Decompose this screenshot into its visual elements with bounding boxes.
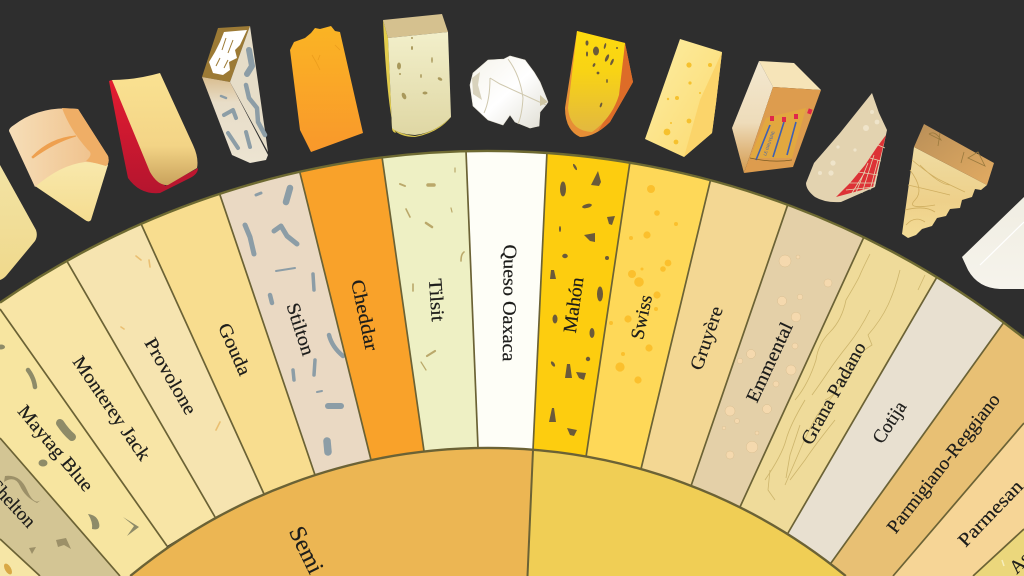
segment: Parmesan: Parmesan bbox=[954, 476, 1024, 551]
segment: Cheddar bbox=[299, 152, 424, 460]
icon: Parmesan cheese bbox=[902, 124, 994, 238]
segment: Parmesan bbox=[893, 423, 1024, 576]
segment: Shelton bbox=[0, 438, 120, 576]
segment: Provolone: Provolone bbox=[140, 335, 200, 419]
segment: Mahón: Mahón bbox=[560, 275, 589, 334]
segment: unnamed lower left bbox=[0, 539, 40, 576]
segment: Monterey Jack: Monterey Jack bbox=[68, 352, 155, 465]
segment: Asiago bbox=[973, 529, 1024, 576]
icon: Tilsit cheese bbox=[383, 14, 451, 137]
segment: Tilsit bbox=[381, 146, 478, 451]
segment: Parmigiano-Reggiano: Parmigiano-Reggiano bbox=[883, 390, 1005, 538]
icon: Mahón cheese bbox=[565, 31, 633, 137]
segment: Queso Oaxaca: Queso Oaxaca bbox=[498, 244, 520, 362]
icon: Cheddar cheese bbox=[290, 26, 363, 152]
segment: Queso Oaxaca bbox=[466, 146, 547, 450]
category: hard bbox=[528, 451, 844, 576]
icon: Queso Oaxaca cheese bbox=[470, 56, 548, 128]
segment: Gruyère: Gruyère bbox=[686, 304, 728, 373]
segment: Maytag Blue: Maytag Blue bbox=[13, 401, 97, 496]
segment: Grana Padano bbox=[740, 232, 940, 533]
icon: Monterey Jack cheese bbox=[9, 108, 109, 222]
segment: Stilton: Stilton bbox=[282, 300, 318, 359]
segment: Cotija bbox=[788, 273, 1007, 563]
segment: Cheddar: Cheddar bbox=[346, 278, 382, 353]
segment: Tilsit: Tilsit bbox=[424, 278, 448, 323]
icon: Swiss cheese bbox=[645, 39, 722, 157]
icon: partial cheese far left bbox=[0, 165, 37, 280]
segment: Cotija: Cotija bbox=[869, 397, 912, 448]
segment: Stilton bbox=[218, 168, 371, 475]
segment: Emmental bbox=[691, 199, 866, 507]
segment: Emmental: Emmental bbox=[742, 319, 798, 406]
icon: white cheese far right bbox=[962, 197, 1024, 289]
panel: outer ring of cheese segments bbox=[0, 146, 1024, 576]
segment: Maytag Blue bbox=[0, 309, 167, 576]
segment: Swiss: Swiss bbox=[627, 293, 657, 341]
segment: Gruyère bbox=[641, 173, 790, 486]
segment: Provolone bbox=[66, 222, 264, 517]
segment: Gouda: Gouda bbox=[213, 320, 255, 379]
segment: Parmigiano-Reggiano bbox=[831, 318, 1024, 576]
icon: Gruyère cheese bbox=[732, 61, 821, 173]
segment: Grana Padano: Grana Padano bbox=[797, 339, 871, 449]
icon: Stilton cheese bbox=[202, 26, 268, 163]
segment: Mahón bbox=[533, 147, 631, 457]
panel: inner ring categories bbox=[120, 440, 860, 576]
segment: Monterey Jack bbox=[0, 259, 215, 546]
segment: Gouda bbox=[140, 190, 315, 494]
icon: Gouda cheese bbox=[109, 73, 198, 193]
category: semi-soft bbox=[120, 440, 533, 576]
icon: Gruyère cheese: LE GRUYERE bbox=[762, 130, 776, 156]
segment: Swiss bbox=[586, 157, 712, 469]
icon: Grana Padano cheese bbox=[806, 93, 887, 202]
